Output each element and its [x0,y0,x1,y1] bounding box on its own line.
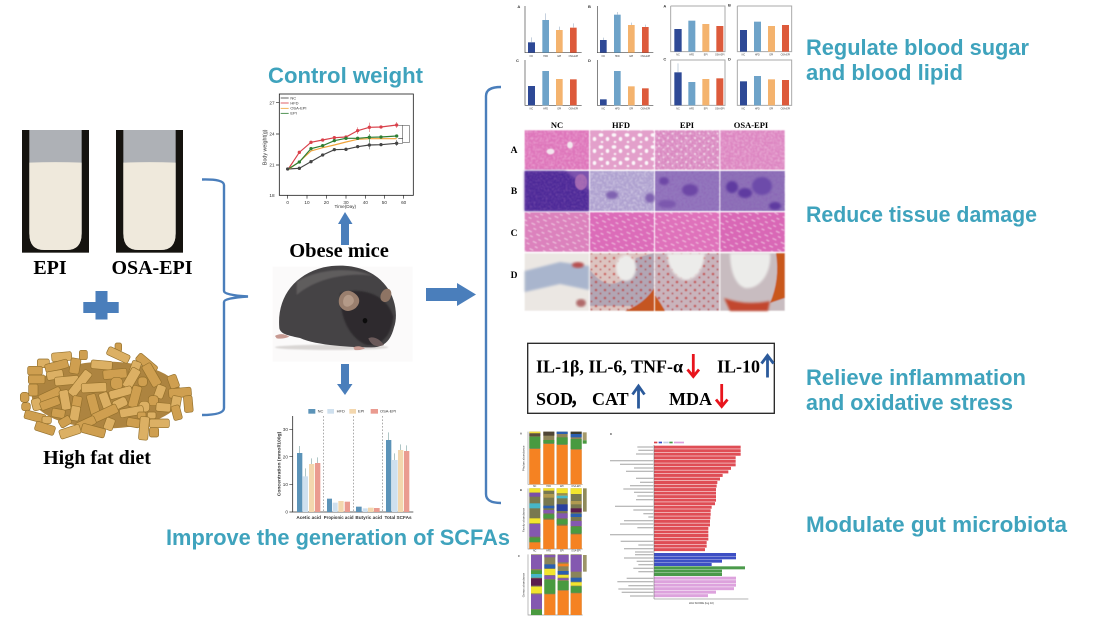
bar chart: SCFA concentration: EPI [358,409,364,414]
heading: relieve inflammation and oxidative stress [806,365,1026,415]
bar chart: C left: HFD [543,108,548,110]
stacked bars: family: NC [533,551,537,553]
column labels: NC [551,120,563,130]
line chart: body weight: 0 [286,200,289,205]
text: cytokines: IL-1β, IL-6, TNF-α [536,356,683,376]
bar chart: SCFA concentration: 30 [283,427,288,432]
row labels [511,146,518,281]
bar chart: B left: NC [602,56,605,58]
text: SOD and CAT: SOD [536,389,573,409]
image: obese mouse [273,266,413,362]
icon: blue up arrow [632,386,644,408]
heading: control weight: Control weight [268,63,424,88]
bar chart: D left: OSA-EPI [641,107,650,110]
arrow: down to SCFAs [337,364,352,395]
panel: inflammation markers [528,343,774,413]
bar chart: D right: OSA-EPI [781,107,790,110]
stacked bars: family: HFD [546,551,551,553]
stacked bars: family [520,488,587,553]
bar chart: B left: B [588,4,591,9]
bar chart: D right [728,57,792,110]
row D: adipose/aorta staining [525,253,785,311]
bar chart: SCFA concentration [277,409,413,520]
text: SOD and CAT: CAT [592,389,629,409]
stacked bars: family: B [520,488,522,492]
line chart: body weight: 60 [401,200,407,205]
column labels: HFD [612,120,630,130]
row labels: C [511,229,518,239]
line chart: body weight [263,94,413,209]
label: EPI: EPI [33,257,67,279]
heading: relieve inflammation and oxidative stress: Relieve inflammation [806,365,1026,390]
row labels: D [511,271,518,281]
bar chart: C right: HFD [689,108,694,110]
row C: kidney [525,212,785,252]
row labels: B [511,187,518,197]
bar chart: A right [663,3,725,57]
stacked bars: phylum: OSA-EPI [571,485,581,488]
stacked bars: genus [518,554,587,615]
bar chart: A left: A [517,4,520,9]
heading: reduce tissue damage: Reduce tissue damage [806,202,1037,227]
line chart: body weight: EPI [290,111,297,116]
stacked bars: phylum: EPI [560,486,564,488]
line chart: body weight: OSA-EPI [290,106,307,111]
panel: serum bar charts [516,3,792,110]
line chart: body weight: 30 [343,200,349,205]
bar chart: B right: EPI [769,55,774,57]
stacked bars: phylum: HFD [546,486,551,488]
column labels: OSA-EPI [734,120,769,130]
bar chart: A left: NC [530,56,533,58]
bar chart: A left: OSA-EPI [569,55,578,58]
bar chart: LDA scores: D [610,432,612,436]
bar chart: A left: EPI [557,56,562,58]
bar chart: SCFA concentration: Total SCFAs [384,515,412,520]
heading: relieve inflammation and oxidative stress: and oxidative stress [806,390,1013,415]
bar chart: C right: OSA-EPI [715,107,725,110]
image: high fat diet pellets [20,343,193,440]
arrow: right to outcomes [426,283,476,306]
bar chart: C right: EPI [704,108,708,110]
bar chart: C right [663,57,725,110]
line chart: body weight: 21 [269,163,275,168]
stacked bars: family: OSA-EPI [571,550,581,553]
bar chart: D left: NC [602,108,605,110]
stacked bars: phylum: A [520,431,522,435]
arrow: up to control weight [338,212,352,245]
bar chart: A right: OSA-EPI [715,54,725,57]
bar chart: D right: EPI [769,108,774,110]
line chart: body weight: 24 [269,132,275,137]
bar chart: C left: C [516,58,519,63]
line chart: body weight: HFD [290,100,299,105]
bar chart: C right: NC [676,108,680,110]
panel: gut microbiota charts [518,431,748,615]
bar chart: D left [588,58,653,110]
line chart: body weight: Body weight(g) [263,129,269,165]
bar chart: C left: EPI [557,108,562,110]
column labels: EPI [680,120,695,130]
stacked bars: genus: C [518,554,520,558]
bracket: outcomes [486,87,501,503]
bar chart: SCFA concentration: 0 [285,510,288,515]
heading: improve the generation of SCFAs: Improve the generation of SCFAs [166,525,510,550]
bar chart: B left: HFD [615,56,620,58]
icon: blue up arrow [762,356,774,378]
line chart: body weight: 10 [304,200,310,205]
bar chart: A right: HFD [689,55,694,57]
label: obese mice: Obese mice [289,240,389,262]
panel: EPI sample tube [22,130,89,253]
bar chart: D left: D [588,58,591,63]
bar chart: SCFA concentration: Acetic acid [296,515,321,520]
icon: red down arrow [716,384,728,406]
stacked bars: family: EPI [560,551,564,553]
icon: red down arrow [688,354,699,376]
line chart: body weight: Time(Day) [335,204,357,209]
bar chart: B right: NC [742,55,745,57]
bar chart: SCFA concentration: NC [318,409,324,414]
bar chart: SCFA concentration: OSA-EPI [380,409,396,414]
row A: liver [525,130,785,170]
text: IL-10: IL-10 [717,356,760,376]
icon: blue plus [83,291,119,320]
bar chart: C right: C [663,57,666,62]
text: SOD and CAT: ， [569,385,587,411]
bar chart: D right: D [728,57,731,62]
line chart: body weight: 20 [324,200,329,205]
bar chart: LDA scores: LDA SCORE (log 10) [689,601,714,605]
bar chart: D right: NC [742,108,745,110]
bar chart: D left: HFD [615,108,620,110]
stacked bars: genus: Genus abundance [522,572,526,597]
panel: OSA-EPI sample tube [116,130,183,253]
heading: regulate blood sugar and blood lipid: and blood lipid [806,60,963,85]
bar chart: B right [728,3,792,57]
bar chart: B left: EPI [629,56,634,58]
panel: tissue histology grid [511,120,785,311]
bar chart: D left: EPI [629,108,634,110]
line chart: body weight: 27 [269,100,275,105]
stacked bars: phylum [520,431,587,488]
bar chart: B left [588,4,653,58]
bar chart: SCFA concentration: HFD [337,409,345,414]
line chart: body weight: 40 [363,200,368,205]
bar chart: B right: B [728,3,731,8]
bar chart: LDA scores [610,432,748,605]
bar chart: C left [516,58,582,110]
bar chart: SCFA concentration: Butyric acid [355,515,382,520]
bar chart: SCFA concentration: Propionic acid [324,515,354,520]
bracket: inputs to mice [202,179,248,415]
bar chart: A left [517,4,582,58]
heading: modulate gut microbiota: Modulate gut microbiota [806,512,1068,537]
stacked bars: phylum: NC [533,486,537,488]
stacked bars: phylum: Phylum abundance [522,445,526,471]
bar chart: C left: NC [530,108,533,110]
line chart: body weight: NC [290,95,296,100]
label: high fat diet: High fat diet [43,447,151,469]
column labels [551,120,769,130]
stacked bars: family: Family abundance [522,507,526,532]
bar chart: SCFA concentration: 10 [283,482,288,487]
bar chart: SCFA concentration: 20 [283,454,288,459]
bar chart: A right: NC [676,55,680,57]
bar chart: A left: HFD [543,56,548,58]
row B: spleen [525,171,785,211]
text: MDA: MDA [669,389,712,409]
bar chart: B right: OSA-EPI [781,54,790,57]
bar chart: A right: A [663,3,666,8]
bar chart: A right: EPI [704,55,708,57]
bar chart: SCFA concentration: Concentration (mmol/100g) [277,431,283,496]
bar chart: B left: OSA-EPI [641,55,650,58]
row labels: A [511,146,518,156]
heading: regulate blood sugar and blood lipid [806,35,1029,85]
line chart: body weight: 18 [269,193,275,198]
line chart: body weight: 50 [382,200,387,205]
bar chart: B right: HFD [755,55,760,57]
bar chart: C left: OSA-EPI [569,107,578,110]
label: OSA-EPI: OSA-EPI [111,257,193,279]
bar chart: D right: HFD [755,108,760,110]
heading: regulate blood sugar and blood lipid: Regulate blood sugar [806,35,1029,60]
